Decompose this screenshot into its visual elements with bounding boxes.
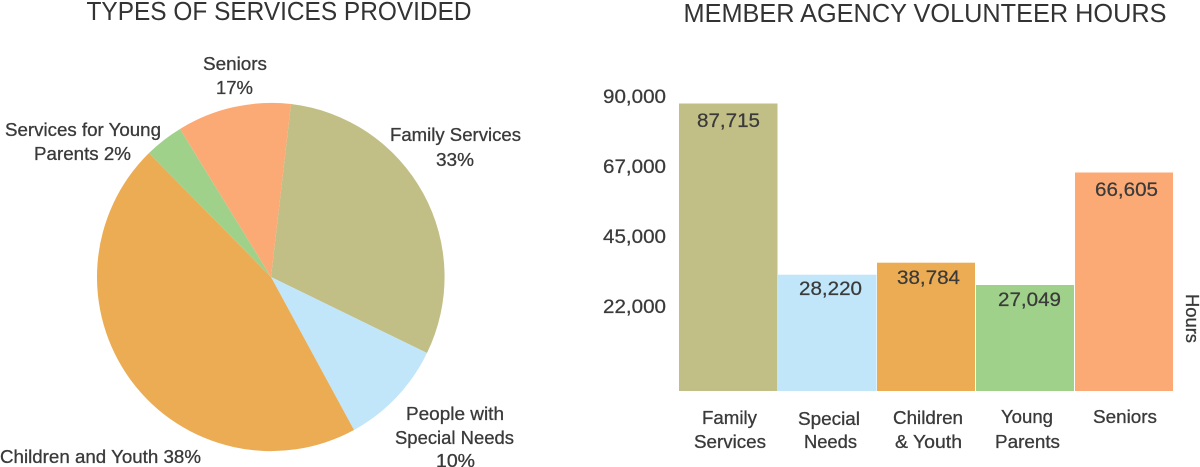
bar category labels: & Youth	[895, 431, 962, 452]
pie chart	[97, 103, 445, 451]
bar values: 28,220	[799, 278, 862, 300]
y axis labels	[603, 86, 666, 318]
pie label: special needs: People with	[406, 403, 504, 424]
bar category labels	[694, 406, 1157, 452]
bar: seniors	[1075, 172, 1173, 391]
bar category labels: Young	[1001, 406, 1053, 427]
bar category labels: Services	[694, 431, 766, 452]
bar chart	[679, 104, 1173, 391]
bar category labels: Family	[702, 407, 758, 428]
bar category labels: Special	[798, 408, 860, 429]
bar values: 38,784	[897, 267, 960, 289]
pie label: children and youth: Children and Youth 38%	[0, 446, 201, 467]
pie label: young parents	[5, 119, 161, 164]
pie label: family services	[390, 124, 521, 170]
y axis labels: 45,000	[603, 226, 666, 248]
bar: special needs	[778, 275, 876, 391]
y axis labels: 22,000	[603, 296, 666, 318]
bar values: 27,049	[998, 289, 1061, 311]
bar category labels: Seniors	[1093, 406, 1157, 427]
bar: family services	[679, 104, 778, 391]
bar category labels: Children	[893, 407, 963, 428]
bar: children and youth	[877, 263, 975, 391]
bar values: 87,715	[697, 110, 760, 132]
bar: young parents	[976, 285, 1074, 391]
pie label: seniors: Seniors	[203, 53, 267, 74]
y axis labels: 67,000	[603, 156, 666, 178]
pie label: special needs: Special Needs	[395, 427, 514, 448]
pie label: family services: 33%	[436, 149, 474, 170]
pie label: seniors: 17%	[216, 77, 253, 98]
pie label: seniors	[203, 53, 267, 98]
pie label: young parents: Services for Young	[5, 119, 161, 140]
pie label: young parents: Parents 2%	[34, 143, 131, 164]
y axis labels: 90,000	[603, 86, 666, 108]
bar category labels: Parents	[995, 431, 1060, 452]
bar category labels: Needs	[804, 431, 857, 452]
pie label: family services: Family Services	[390, 124, 521, 145]
bar values: 66,605	[1095, 179, 1158, 201]
bar values	[697, 110, 1158, 311]
pie label: special needs	[395, 403, 514, 467]
